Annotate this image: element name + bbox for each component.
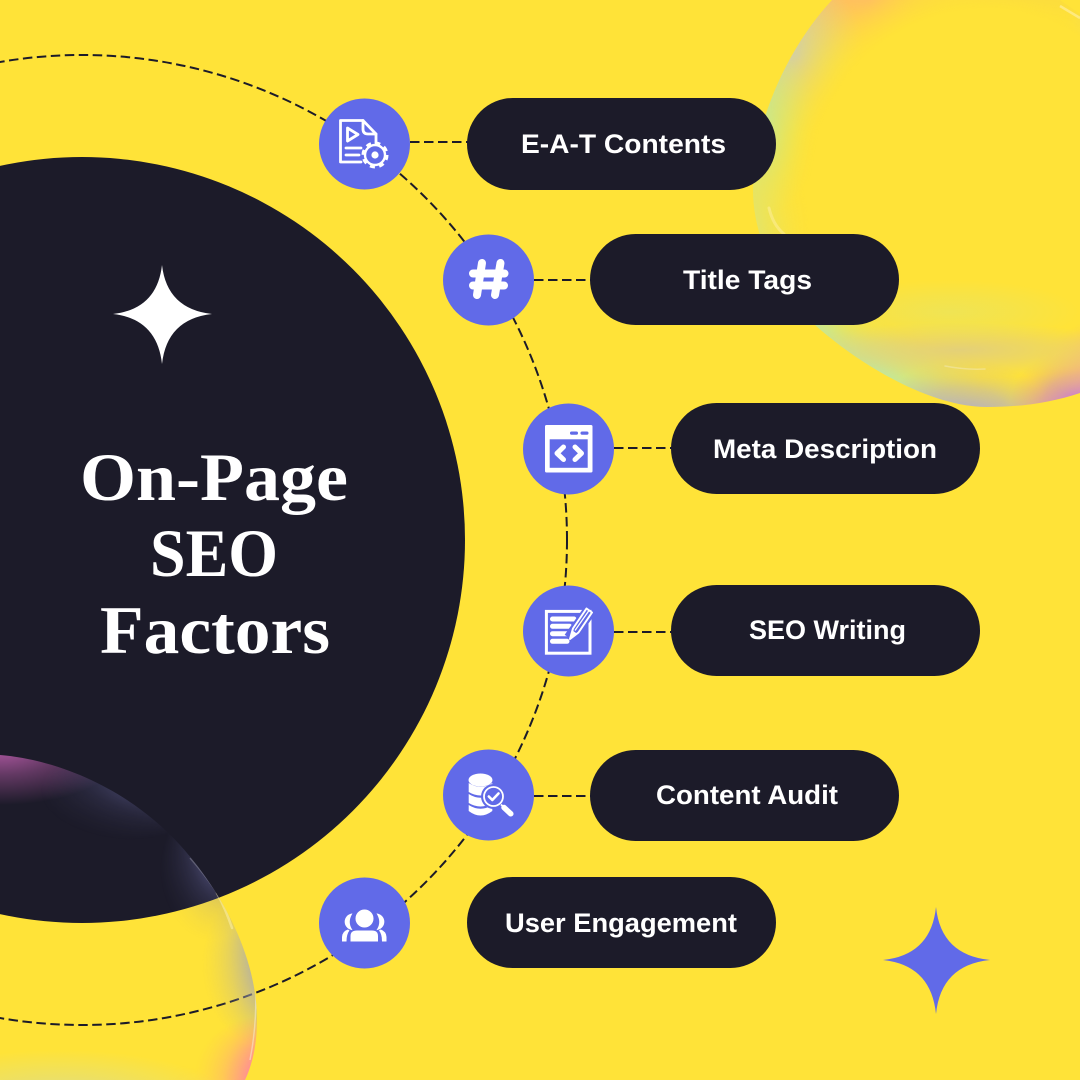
item: E-A-T Contents: [319, 98, 776, 190]
pill: [671, 403, 980, 494]
connector: [614, 447, 672, 449]
dashed ring: [0, 55, 567, 1025]
icon: code window: [523, 404, 614, 494]
icon: database with magnifier: [443, 750, 534, 840]
label: SEO Writing: [749, 615, 906, 645]
bubble: top right: [753, 0, 1080, 407]
title: [80, 439, 348, 668]
icon: hash: [443, 234, 534, 326]
pill: [467, 98, 776, 190]
label: User Engagement: [505, 908, 737, 938]
item: Meta Description: [523, 403, 980, 494]
connector: [410, 141, 468, 143]
item: Content Audit: [443, 750, 899, 841]
item: User Engagement: [319, 877, 776, 968]
dark circle panel: [0, 157, 465, 923]
pill: [590, 750, 899, 841]
connector: [534, 795, 591, 797]
icon: notepad and pencil: [523, 586, 614, 676]
item: Title Tags: [443, 234, 899, 326]
pill: [671, 585, 980, 676]
label: Meta Description: [713, 434, 937, 464]
label: Title Tags: [683, 265, 812, 295]
connector: [614, 631, 672, 633]
title: Factors: [100, 592, 330, 668]
connector: [534, 279, 591, 281]
title: On-Page: [80, 439, 348, 515]
icon: blue sparkle: [883, 907, 990, 1014]
label: E-A-T Contents: [521, 129, 726, 159]
pill: [590, 234, 899, 325]
label: Content Audit: [656, 780, 838, 810]
bubble: bottom left: [0, 755, 257, 1080]
title: SEO: [150, 515, 278, 591]
icon: document with gear: [319, 98, 410, 190]
icon: white sparkle: [113, 265, 212, 364]
item: SEO Writing: [523, 585, 980, 676]
icon: users: [319, 878, 410, 968]
pill: [467, 877, 776, 968]
